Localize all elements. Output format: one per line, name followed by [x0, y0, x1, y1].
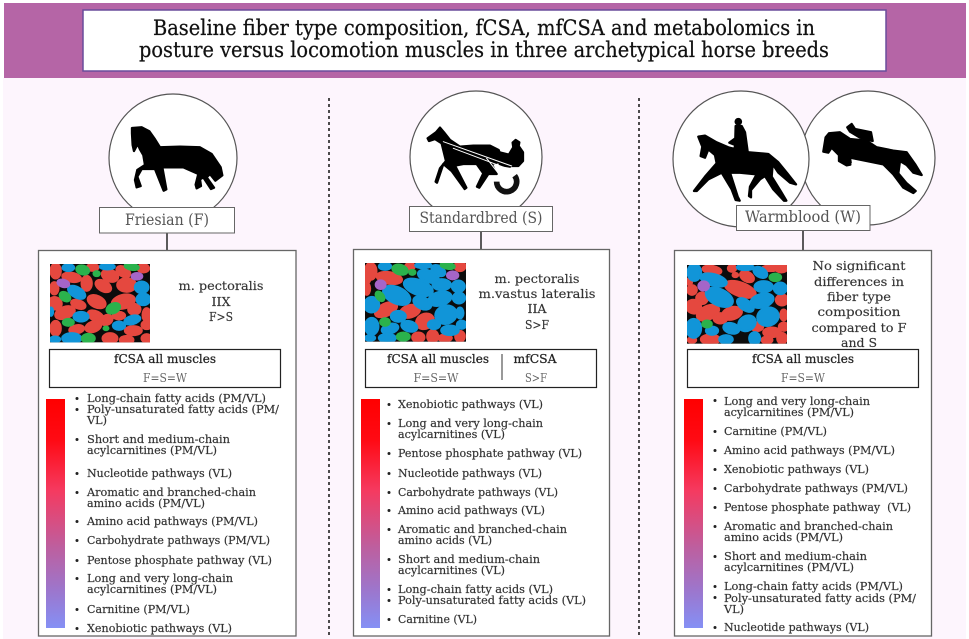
- ranked metabolite list: acylcarnitines (PM/VL): [87, 582, 217, 596]
- icon: jumping horse in circle: [801, 91, 935, 225]
- ranked metabolite list: Aromatic and branched-chain: [397, 522, 568, 536]
- ranked metabolite list: Carbohydrate pathways (PM/VL): [87, 533, 270, 547]
- ranked metabolite list: Poly-unsaturated fatty acids (PM/: [87, 402, 279, 416]
- fCSA and mfCSA box: [366, 350, 596, 388]
- muscle finding text: IIA: [528, 301, 547, 316]
- gradient scale bar: [361, 399, 380, 628]
- column: Friesian: [38, 94, 296, 636]
- muscle finding text: m. pectoralis: [494, 271, 580, 286]
- comparison note: compared to F: [812, 320, 907, 335]
- comparison note: [812, 258, 907, 350]
- comparison note: No significant: [812, 258, 906, 273]
- ranked metabolite list: Long and very long-chain: [398, 416, 544, 430]
- ranked metabolite list: Poly-unsaturated fatty acids (VL): [398, 593, 586, 607]
- muscle finding text: F>S: [209, 309, 233, 324]
- dashed divider left: [328, 98, 330, 636]
- ranked metabolite list: Short and medium-chain: [398, 552, 541, 566]
- ranked metabolite list: Long-chain fatty acids (PM/VL): [87, 391, 266, 405]
- comparison note: differences in: [814, 274, 904, 289]
- icon: Friesian horse in circle: [109, 94, 237, 222]
- title box: posture versus locomotion muscles in three archetypical horse breeds: [139, 38, 829, 63]
- ranked metabolite list: Nucleotide pathways (VL): [87, 466, 232, 480]
- ranked metabolite list: VL): [723, 602, 744, 616]
- ranked metabolite list: Long-chain fatty acids (PM/VL): [724, 579, 903, 593]
- gradient scale bar: [46, 399, 65, 628]
- muscle finding text: m.vastus lateralis: [478, 286, 596, 301]
- breed label: [410, 206, 552, 232]
- ranked metabolite list: Carnitine (VL): [398, 612, 477, 626]
- ranked metabolite list: Carbohydrate pathways (PM/VL): [724, 481, 908, 495]
- column: Standardbred: [354, 91, 610, 636]
- ranked metabolite list: Xenobiotic pathways (VL): [724, 462, 869, 476]
- ranked metabolite list: [388, 397, 586, 626]
- breed label: [100, 208, 234, 233]
- connector: [166, 233, 168, 250]
- ranked metabolite list: Aromatic and branched-chain: [723, 519, 894, 533]
- ranked metabolite list: Carnitine (PM/VL): [87, 602, 190, 616]
- fCSA box: [50, 350, 280, 388]
- ranked metabolite list: Nucleotide pathways (VL): [398, 466, 542, 480]
- title box: Baseline fiber type composition, fCSA, mfCSA and metabolomics in: [153, 16, 815, 41]
- fiber micrograph: [47, 262, 152, 344]
- comparison note: composition: [818, 304, 900, 319]
- ranked metabolite list: acylcarnitines (PM/VL): [87, 443, 217, 457]
- ranked metabolite list: Short and medium-chain: [87, 432, 231, 446]
- fiber micrograph: [362, 261, 466, 342]
- ranked metabolite list: Long-chain fatty acids (VL): [398, 582, 553, 596]
- ranked metabolite list: amino acids (PM/VL): [87, 496, 205, 510]
- panel: Warmblood details: [674, 250, 932, 636]
- breed label: Warmblood (W): [745, 207, 861, 226]
- connector: [480, 231, 482, 249]
- ranked metabolite list: [714, 394, 916, 634]
- ranked metabolite list: Long and very long-chain: [724, 394, 871, 408]
- ranked metabolite list: Xenobiotic pathways (VL): [398, 397, 543, 411]
- panel: Standardbred details: [354, 250, 610, 636]
- comparison note: fiber type: [827, 289, 891, 304]
- comparison note: and S: [841, 335, 877, 350]
- ranked metabolite list: acylcarnitines (PM/VL): [724, 560, 854, 574]
- ranked metabolite list: Xenobiotic pathways (VL): [87, 621, 232, 635]
- ranked metabolite list: Amino acid pathways (PM/VL): [723, 443, 895, 457]
- ranked metabolite list: Amino acid pathways (PM/VL): [86, 514, 258, 528]
- fCSA and mfCSA box: fCSA all muscles: [387, 351, 489, 366]
- ranked metabolite list: Carnitine (PM/VL): [724, 424, 827, 438]
- header band: [4, 3, 966, 78]
- fiber micrograph: [684, 264, 788, 344]
- fCSA and mfCSA box: F=S=W: [414, 371, 459, 385]
- fCSA box: F=S=W: [781, 371, 826, 385]
- muscle finding text: S>F: [525, 317, 549, 332]
- breed label: Friesian (F): [125, 210, 209, 229]
- fCSA box: [688, 350, 918, 388]
- fCSA box: fCSA all muscles: [114, 351, 216, 366]
- icon: harness horse in circle: [410, 91, 542, 223]
- column: Warmblood: [673, 91, 935, 636]
- muscle finding text: m. pectoralis: [178, 278, 264, 293]
- ranked metabolite list: Poly-unsaturated fatty acids (PM/: [724, 591, 916, 605]
- ranked metabolite list: Carbohydrate pathways (VL): [398, 485, 558, 499]
- ranked metabolite list: Long and very long-chain: [87, 571, 234, 585]
- ranked metabolite list: amino acids (PM/VL): [724, 530, 843, 544]
- ranked metabolite list: acylcarnitines (VL): [398, 427, 505, 441]
- fCSA box: fCSA all muscles: [752, 351, 854, 366]
- ranked metabolite list: Pentose phosphate pathway (VL): [398, 446, 582, 460]
- ranked metabolite list: Aromatic and branched-chain: [86, 485, 257, 499]
- fCSA box: F=S=W: [143, 371, 188, 385]
- muscle finding text: IIX: [212, 294, 231, 309]
- ranked metabolite list: [76, 391, 279, 635]
- ranked metabolite list: Pentose phosphate pathway (VL): [724, 500, 911, 514]
- ranked metabolite list: VL): [86, 413, 107, 427]
- title box: [83, 10, 886, 71]
- muscle finding text: [478, 271, 596, 332]
- gradient scale bar: [684, 399, 703, 628]
- ranked metabolite list: amino acids (VL): [398, 533, 492, 547]
- fCSA and mfCSA box: mfCSA: [514, 351, 557, 366]
- dashed divider right: [638, 98, 640, 636]
- panel: Friesian details: [38, 250, 296, 636]
- connector: [802, 230, 804, 250]
- ranked metabolite list: Nucleotide pathways (VL): [724, 620, 869, 634]
- icon: dressage horse in circle: [673, 91, 809, 227]
- breed label: Standardbred (S): [420, 208, 542, 227]
- muscle finding text: [178, 278, 264, 324]
- ranked metabolite list: acylcarnitines (VL): [398, 563, 505, 577]
- ranked metabolite list: Short and medium-chain: [724, 549, 868, 563]
- ranked metabolite list: acylcarnitines (PM/VL): [724, 405, 854, 419]
- ranked metabolite list: Amino acid pathways (VL): [397, 503, 545, 517]
- fCSA and mfCSA box: S>F: [525, 371, 547, 385]
- ranked metabolite list: Pentose phosphate pathway (VL): [87, 553, 272, 567]
